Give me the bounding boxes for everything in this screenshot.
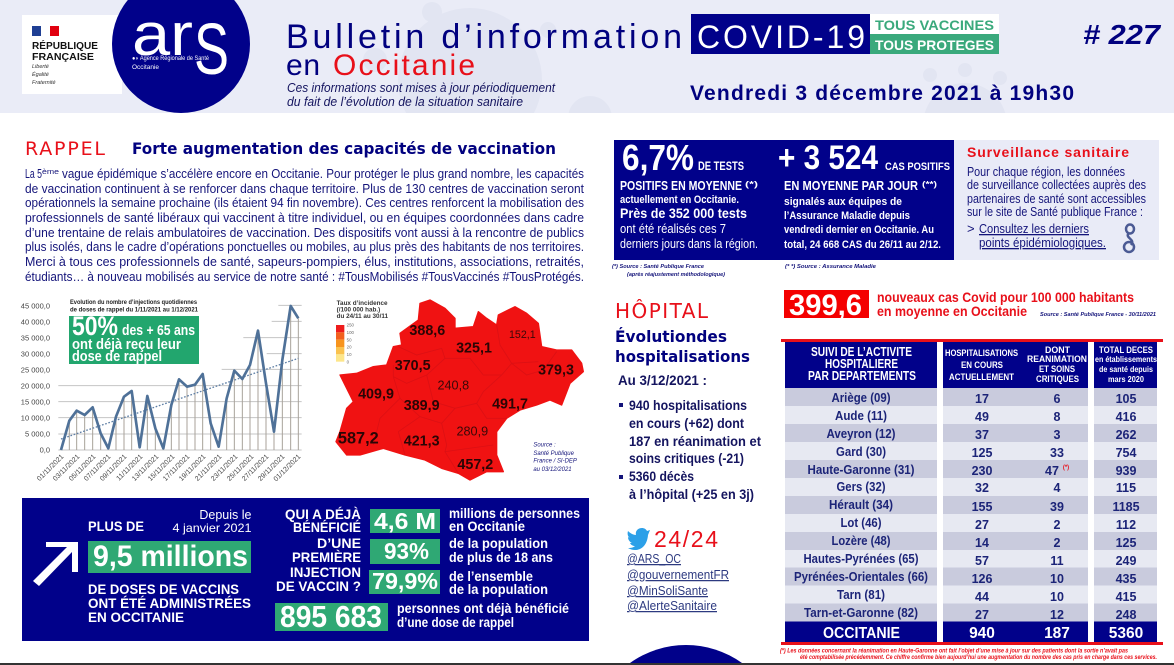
logo: ARS circle: S — [194, 10, 229, 90]
table deaths column: 112 — [1116, 518, 1136, 532]
rappel paragraph: vague épidémique s’accélère encore en Occitanie. Pour protéger le plus grand nombre, les capacités — [62, 167, 584, 181]
surveillance link: Consultez les derniers — [979, 221, 1089, 236]
stat: positive cases: total, 24 668 CAS du 26/11 au 2/12. — [784, 239, 941, 251]
map legend: 20 — [347, 345, 352, 350]
x axis dates: 21/11/2021 — [194, 453, 223, 483]
table réanimation column: 10 — [1050, 572, 1064, 586]
table hospitalisations column: 125 — [972, 446, 992, 460]
table department names — [794, 391, 928, 620]
map shape — [336, 300, 583, 480]
table header: REANIMATION — [1027, 354, 1087, 365]
table réanimation column: 33 — [1050, 446, 1064, 460]
map source: France / SI-DEP — [533, 459, 577, 465]
rappel paragraph — [25, 167, 584, 284]
decorative bottom circle — [630, 645, 742, 663]
map values: 240,8 — [437, 378, 469, 392]
slogan: TOUS PROTEGES — [875, 37, 994, 53]
hôpital bullets: 187 en réanimation et — [629, 434, 761, 449]
table deaths column: 115 — [1116, 481, 1136, 495]
map values: 325,1 — [456, 340, 492, 356]
question: D’UNE — [317, 535, 361, 551]
subtitle: du fait de l’évolution de la situation sanitaire — [287, 94, 523, 109]
logo: ARS circle: Occitanie — [132, 65, 160, 71]
panel: rappel — [25, 138, 584, 284]
footnote: sources: (après réajustement méthodologique) — [627, 272, 725, 278]
logo: République Française: FRANÇAISE — [32, 51, 94, 63]
hôpital bullets — [619, 398, 761, 502]
x axis dates: 01/12/2021 — [273, 453, 302, 483]
table header — [785, 342, 1157, 388]
panel: hôpital — [615, 299, 761, 502]
x axis dates: 05/11/2021 — [68, 453, 97, 483]
stat: positivity: ont été réalisés ces 7 — [620, 221, 726, 236]
hôpital bullets: 940 hospitalisations — [629, 398, 747, 413]
slogan: TOUS VACCINES — [875, 17, 994, 33]
x axis dates: 03/11/2021 — [52, 453, 81, 483]
table header: en établissements — [1095, 355, 1157, 364]
stat: booster: 895 683 — [280, 599, 382, 634]
stat: booster: personnes ont déjà bénéficié — [397, 600, 569, 616]
table hospitalisations column: 230 — [972, 464, 992, 478]
table deaths column: 105 — [1116, 392, 1136, 406]
rappel paragraph: d’une trentaine de relais ambulatoires de vaccination. Des dispositifs vont aussi à la rencontre de publics — [25, 226, 584, 240]
question — [276, 506, 361, 594]
stat: positive cases: CAS POSITIFS — [885, 161, 950, 173]
table deaths column: 416 — [1116, 410, 1136, 424]
table header: HOSPITALIERE — [825, 357, 898, 371]
table header: SUIVI DE L’ACTIVITE — [811, 345, 912, 359]
icon: link chain — [1124, 224, 1134, 252]
table header: PAR DEPARTEMENTS — [808, 369, 916, 383]
table department names: Gers (32) — [836, 480, 886, 494]
chart title — [70, 299, 198, 314]
twitter handles: @ARS_OC — [627, 552, 681, 566]
24/24: 24/24 — [654, 526, 718, 552]
map values: 389,9 — [404, 398, 440, 414]
table réanimation column: 47 — [1045, 464, 1059, 478]
stat: positivity: POSITIFS EN MOYENNE — [620, 179, 742, 193]
callout: 50% — [69, 311, 199, 365]
stat: positivity: actuellement en Occitanie. — [620, 194, 739, 206]
title: Bulletin d’information — [286, 18, 682, 56]
x axis dates: 19/11/2021 — [178, 453, 207, 483]
table department names: Aude (11) — [835, 409, 887, 423]
issue number: # 227 — [1083, 19, 1162, 50]
surveillance text: partenaires de santé sont accessibles — [967, 192, 1146, 206]
y axis labels: 45 000,0 — [21, 302, 50, 310]
surveillance text — [967, 165, 1146, 219]
question: PREMIÈRE — [292, 549, 361, 565]
surveillance link — [967, 221, 1106, 250]
twitter handles — [627, 552, 729, 613]
table réanimation column: 4 — [1054, 481, 1061, 495]
map legend: 250 — [347, 323, 354, 328]
table header: ET SOINS — [1039, 364, 1075, 375]
icon: twitter bird — [628, 528, 650, 550]
stat: positivity: derniers jours dans la région. — [620, 236, 758, 251]
twitter handles: @AlerteSanitaire — [627, 599, 717, 613]
stat: positivity: 6,7% — [622, 137, 694, 178]
title: en — [286, 49, 320, 82]
callout: 50%: dose de rappel — [72, 348, 162, 365]
rappel paragraph: La 5 — [25, 167, 42, 181]
rappel title: Forte augmentation des capacités de vaccination — [132, 139, 556, 158]
subtitle: Ces informations sont mises à jour périodiquement — [287, 80, 556, 95]
map source: Source : — [533, 443, 556, 449]
map source: Santé Publique — [533, 451, 575, 457]
question: BÉNÉFICIÉ — [293, 519, 361, 535]
total doses: 4 janvier 2021 — [172, 521, 252, 535]
map legend: 100 — [347, 330, 354, 335]
slogan — [870, 14, 999, 54]
stat: positive cases: (**) — [922, 179, 937, 189]
rappel paragraph: étudiants… à nouveau mobilisés au service de notre santé : #TousMobilisés #TousVaccinés #TousProtégés. — [25, 270, 584, 284]
y axis labels: 0,0 — [40, 446, 50, 454]
total doses: PLUS DE — [88, 518, 144, 534]
table deaths column: 125 — [1116, 536, 1136, 550]
table deaths column: 262 — [1116, 428, 1136, 442]
table header: CRITIQUES — [1036, 374, 1079, 385]
table deaths column: 435 — [1116, 572, 1136, 586]
map legend: du 24/11 au 30/11 — [337, 313, 389, 320]
line chart: injections — [21, 299, 302, 483]
stat: 4,6 M: 4,6 M — [374, 508, 436, 534]
title: Occitanie — [333, 49, 475, 82]
surveillance heading: Surveillance sanitaire — [967, 144, 1129, 160]
x axis dates: 29/11/2021 — [257, 453, 286, 483]
stat: booster: d’une dose de rappel — [397, 614, 514, 630]
footnote: sources: (* *) Source : Assurance Maladie — [785, 264, 876, 270]
table deaths column: 415 — [1116, 590, 1136, 604]
table hospitalisations column: 155 — [972, 500, 992, 514]
table header: de santé depuis — [1099, 365, 1153, 374]
stat: positive cases: + 3 524 — [778, 139, 878, 177]
table footnote: (*) Les données concernant la réanimation en Haute-Garonne ont fait l’objet d’une mise à jour sur des patients dont la sortie n’avait pas — [780, 648, 1129, 654]
table réanimation column: 10 — [1050, 590, 1064, 604]
table réanimation column: 11 — [1050, 554, 1064, 568]
x axis dates: 07/11/2021 — [83, 453, 112, 483]
y axis labels: 15 000,0 — [21, 398, 50, 406]
table total row: 940 — [969, 625, 995, 642]
map values: 409,9 — [358, 386, 394, 402]
surveillance text: Pour chaque région, les données — [967, 165, 1125, 179]
table department names: Hérault (34) — [829, 498, 893, 512]
stat: positive cases: signalés aux équipes de — [784, 196, 902, 208]
twitter handles: @gouvernementFR — [627, 568, 729, 582]
table réanimation column: 39 — [1050, 500, 1064, 514]
table hospitalisations column: 14 — [975, 536, 989, 550]
map values: 421,3 — [404, 434, 440, 450]
table department names: Lot (46) — [840, 516, 882, 530]
table deaths column: 754 — [1116, 446, 1136, 460]
logo: ARS circle: ●◗ Agence Régionale de Santé — [132, 56, 210, 62]
panel: tests and cases — [614, 137, 954, 260]
table department names: Haute-Garonne (31) — [808, 463, 914, 477]
hôpital heading: HÔPITAL — [615, 299, 709, 323]
footnote: sources: (*) Source : Santé Publique France — [612, 264, 704, 270]
table department names: Tarn (81) — [837, 588, 885, 602]
x axis dates: 27/11/2021 — [241, 453, 270, 483]
total doses: Depuis le — [199, 508, 252, 522]
y axis labels: 20 000,0 — [21, 382, 50, 390]
total doses: ONT ÉTÉ ADMINISTRÉES — [88, 595, 251, 611]
table footnote — [780, 648, 1157, 661]
hôpital date: Au 3/12/2021 : — [618, 373, 707, 388]
table deaths column: 248 — [1116, 608, 1136, 622]
hôpital subtitle — [615, 327, 750, 366]
logo: République Française: Égalité — [32, 71, 49, 78]
hôpital subtitle: Évolutiondes — [615, 327, 727, 346]
rappel paragraph: ème — [42, 167, 59, 176]
stat: positive cases: l’Assurance Maladie depuis — [784, 210, 910, 222]
surveillance text: de surveillance collectées auprès des — [967, 178, 1146, 192]
rappel paragraph: opérationnels la semaine prochaine (ils étaient 94 fin novembre). Ces centres renforcent la mobilisation des — [25, 196, 584, 210]
x axis dates: 01/11/2021 — [36, 453, 65, 483]
table total row: 5360 — [1109, 625, 1143, 642]
logo: République Française: RÉPUBLIQUE — [32, 39, 98, 52]
table header: EN COURS — [961, 360, 1003, 371]
callout: new cases: Source : Santé Publique France - 30/11/2021 — [1040, 312, 1156, 318]
table réanimation column: 3 — [1054, 428, 1061, 442]
stat: 4,6 M: en Occitanie — [449, 518, 525, 534]
stat: positivity: (*) — [745, 179, 758, 189]
y axis labels: 5 000,0 — [25, 430, 50, 438]
hôpital bullets: 5360 décès — [629, 469, 694, 484]
table hospitalisations column: 126 — [972, 572, 992, 586]
surveillance text: sur le site de Santé publique France : — [967, 205, 1143, 219]
surveillance link: > — [967, 221, 975, 236]
logo: République Française — [22, 15, 122, 94]
logo: République Française: Fraternité — [32, 80, 56, 86]
rappel paragraph: plus isolés, dans le cadre d’opérations ponctuelles ou mobiles, au plus près des habitants de nos territoires. — [25, 240, 584, 254]
map source: au 03/12/2021 — [533, 467, 572, 473]
total doses: EN OCCITANIE — [88, 609, 184, 625]
stat: positive cases: vendredi dernier en Occitanie. Au — [784, 224, 934, 236]
stat: positivity — [620, 137, 758, 251]
callout: 50%: 50% — [72, 311, 118, 341]
map values: 457,2 — [457, 457, 493, 473]
table réanimation column: 2 — [1054, 536, 1061, 550]
y axis labels: 30 000,0 — [21, 350, 50, 358]
table total row: 187 — [1044, 625, 1070, 642]
stat: positive cases: EN MOYENNE PAR JOUR — [784, 179, 918, 193]
map values: 491,7 — [492, 396, 528, 412]
x axis dates: 13/11/2021 — [131, 453, 160, 483]
title — [286, 18, 682, 82]
subtitle — [287, 80, 556, 109]
rappel paragraph: Merci à tous ces professionnels de santé, sapeurs-pompiers, élus, institutions, associations, retraités, — [25, 255, 584, 269]
map legend: 0 — [347, 359, 350, 364]
table department names: Hautes-Pyrénées (65) — [804, 552, 918, 566]
grid and data — [58, 305, 302, 450]
table hospitalisations column — [972, 392, 992, 622]
y axis labels: 10 000,0 — [21, 414, 50, 422]
stat: 79,9%: 79,9% — [372, 568, 438, 594]
x axis dates: 23/11/2021 — [210, 453, 239, 483]
table total row — [785, 622, 1157, 642]
map legend: 10 — [347, 352, 352, 357]
table hospitalisations column: 37 — [975, 428, 989, 442]
map source — [533, 443, 577, 473]
table hospitalisations column: 32 — [975, 481, 989, 495]
hôpital bullets: soins critiques (-21) — [629, 451, 744, 466]
total doses: DE DOSES DE VACCINS — [88, 581, 239, 597]
logo: République Française: Liberté — [32, 64, 49, 70]
logo: ARS circle: ar — [132, 1, 193, 68]
rappel paragraph: de vaccination continuent à se renforcer dans chaque territoire. Plus de 130 centres de vaccination seront — [25, 182, 584, 196]
table: departments — [781, 339, 1163, 645]
stat: positivity: Près de 352 000 tests — [620, 205, 747, 221]
question: INJECTION — [290, 564, 361, 580]
table hospitalisations column: 27 — [975, 608, 989, 622]
table header: TOTAL DECES — [1099, 345, 1153, 355]
map values: 370,5 — [395, 358, 431, 374]
table hospitalisations column: 49 — [975, 410, 989, 424]
map values: 388,6 — [409, 323, 445, 339]
map values: 280,9 — [456, 424, 488, 438]
table department names: Lozère (48) — [832, 534, 890, 548]
table réanimation column: 12 — [1050, 608, 1064, 622]
y axis labels: 40 000,0 — [21, 318, 50, 326]
map values — [338, 323, 574, 473]
question: DE VACCIN ? — [276, 578, 361, 594]
table department names: Tarn-et-Garonne (82) — [804, 606, 918, 620]
table header: DONT — [1045, 345, 1070, 356]
callout: 50%: des + 65 ans — [122, 322, 195, 339]
stat: 4,6 M: millions de personnes — [449, 505, 580, 521]
COVID-19 badge: COVID-19 — [697, 19, 865, 55]
surveillance link: points épidémiologiques. — [979, 235, 1106, 250]
map legend — [336, 300, 389, 364]
table department names: Aveyron (12) — [826, 427, 896, 441]
stat: 79,9%: de l’ensemble — [449, 568, 533, 584]
stat: positive cases — [778, 139, 950, 251]
stat: 93% — [370, 535, 553, 565]
table deaths column — [1112, 392, 1140, 622]
panel: surveillance sanitaire — [954, 140, 1159, 260]
x axis dates: 11/11/2021 — [115, 453, 144, 482]
panel: twitter — [627, 526, 729, 613]
y axis labels: 35 000,0 — [21, 334, 50, 342]
map legend: (/100 000 hab.) — [337, 307, 380, 314]
table réanimation column — [1045, 392, 1069, 622]
table deaths column: 939 — [1116, 464, 1136, 478]
x axis dates — [36, 453, 302, 483]
callout: new cases: nouveaux cas Covid pour 100 000 habitants — [877, 290, 1134, 305]
table réanimation column: 8 — [1054, 410, 1061, 424]
twitter handles: @MinSoliSante — [627, 584, 708, 598]
map values: 379,3 — [538, 362, 574, 378]
table total row: OCCITANIE — [823, 625, 900, 642]
table deaths column: 249 — [1116, 554, 1136, 568]
total doses — [88, 508, 252, 625]
map legend: 50 — [347, 337, 352, 342]
footnote: sources — [612, 264, 876, 278]
stat: 79,9%: de la population — [449, 581, 548, 597]
map values: 152,1 — [509, 329, 536, 341]
table header: HOSPITALISATIONS — [945, 348, 1018, 359]
y axis labels — [21, 302, 50, 454]
table réanimation column: 6 — [1054, 392, 1061, 406]
stat: positivity: DE TESTS — [698, 159, 744, 173]
hôpital subtitle: hospitalisations — [615, 347, 750, 366]
hôpital bullets: à l’hôpital (+25 en 3j) — [629, 487, 754, 502]
x axis dates: 17/11/2021 — [162, 453, 191, 483]
table hospitalisations column: 17 — [975, 392, 989, 406]
table deaths column: 1185 — [1112, 500, 1140, 514]
panel: vaccination — [22, 498, 589, 641]
table department names: Ariège (09) — [832, 391, 890, 405]
callout: new cases: 399,6 — [789, 289, 862, 322]
stat: 93%: de plus de 18 ans — [449, 549, 553, 565]
callout: new cases: en moyenne en Occitanie — [877, 304, 1027, 319]
stat: 4,6 M — [370, 505, 580, 534]
table réanimation column: 2 — [1054, 518, 1061, 532]
table hospitalisations column: 57 — [975, 554, 989, 568]
table department names: Pyrénées-Orientales (66) — [794, 570, 928, 584]
table rows background — [785, 388, 1157, 622]
y axis labels: 25 000,0 — [21, 366, 50, 374]
header band — [0, 0, 1174, 173]
map legend: Taux d’incidence — [337, 300, 388, 307]
rappel paragraph: professionnels de santé libéraux qui vaccinent à titre individuel, ou en équipes coordonnées dans cadre — [25, 211, 584, 225]
stat: 93%: de la population — [449, 535, 548, 551]
stat: booster — [275, 599, 569, 634]
callout: 50%: ont déjà reçu leur — [72, 336, 181, 353]
question: QUI A DÉJÀ — [285, 506, 361, 522]
hôpital bullets: en cours (+62) dont — [629, 416, 744, 431]
table hospitalisations column: 44 — [975, 590, 989, 604]
table department names: Gard (30) — [836, 445, 886, 459]
table header: ACTUELLEMENT — [949, 372, 1014, 383]
icon: up arrow — [33, 542, 78, 586]
x axis dates: 15/11/2021 — [147, 453, 176, 483]
date: Vendredi 3 décembre 2021 à 19h30 — [690, 82, 1074, 105]
x axis dates: 25/11/2021 — [226, 453, 255, 483]
x axis dates: 09/11/2021 — [99, 453, 128, 483]
rappel heading: RAPPEL — [25, 138, 105, 160]
table hospitalisations column: 27 — [975, 518, 989, 532]
chart title: de doses de rappel du 1/11/2021 au 1/12/2021 — [70, 306, 198, 314]
logo: ARS circle — [112, 0, 250, 113]
table header: mars 2020 — [1108, 375, 1144, 384]
map values: 587,2 — [338, 429, 379, 447]
callout: new cases — [784, 289, 1156, 322]
chart title: Evolution du nombre d’injections quotidiennes — [70, 299, 197, 306]
stat: 79,9% — [369, 568, 548, 597]
map: incidence by department — [336, 300, 583, 480]
table réanimation column: (*) — [1063, 465, 1069, 471]
stat: 93%: 93% — [384, 538, 429, 564]
total doses: 9,5 millions — [93, 540, 248, 573]
